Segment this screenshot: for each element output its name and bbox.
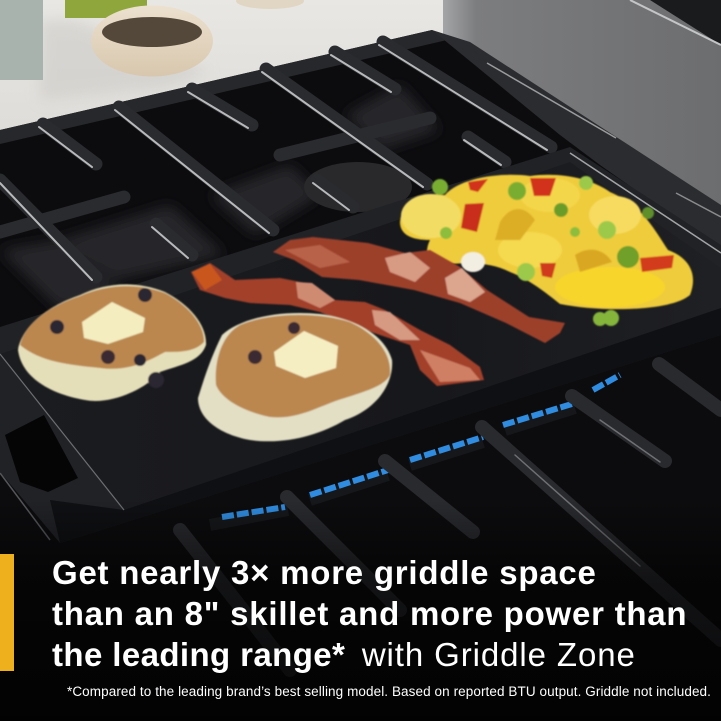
rear corner rail bbox=[630, 0, 721, 45]
bacon strip lower bbox=[191, 263, 484, 386]
headline: Get nearly 3× more griddle space bbox=[52, 554, 597, 591]
burner flames bbox=[210, 375, 620, 525]
butter bbox=[82, 302, 145, 344]
lower grates bbox=[180, 364, 721, 670]
butter bbox=[274, 331, 338, 378]
enamel reflections bbox=[0, 85, 440, 310]
rear frame and right rail bbox=[0, 30, 721, 250]
bowl of pepper bbox=[91, 6, 213, 76]
bottom darkening bbox=[0, 500, 721, 721]
griddle bbox=[0, 147, 721, 543]
pancake right bbox=[198, 313, 392, 441]
headline: than an 8" skillet and more power than bbox=[52, 595, 687, 632]
upper grates bbox=[0, 42, 551, 280]
burner cap bbox=[304, 162, 412, 212]
bacon strip upper bbox=[273, 237, 565, 343]
eggs bbox=[400, 175, 693, 326]
pancake left bbox=[18, 284, 206, 401]
griddle handle cutout bbox=[5, 415, 78, 492]
counter bbox=[0, 0, 445, 135]
towel bbox=[0, 0, 43, 80]
footnote: *Compared to the leading brand’s best selling model. Based on reported BTU output. Griddle not included. bbox=[67, 684, 711, 699]
green box bbox=[65, 0, 147, 18]
accent bar bbox=[0, 554, 14, 671]
stainless backguard bbox=[443, 0, 721, 215]
headline: the leading range* with Griddle Zone bbox=[52, 636, 636, 673]
